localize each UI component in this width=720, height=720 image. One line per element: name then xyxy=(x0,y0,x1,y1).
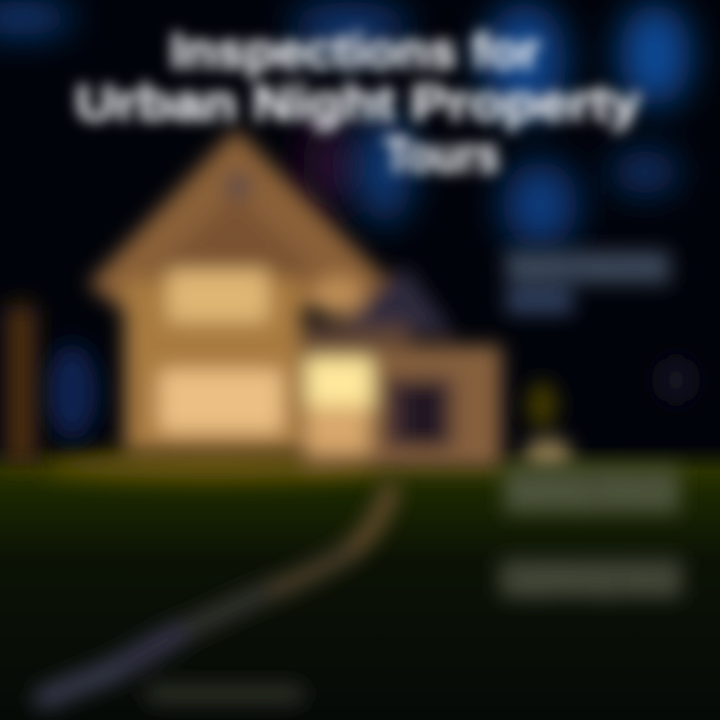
faint distant light xyxy=(659,358,693,402)
text block: sky caption: details xyxy=(505,286,575,316)
attic window xyxy=(225,174,251,198)
porch opening xyxy=(385,378,453,448)
glowing house xyxy=(88,128,502,468)
porch roof band xyxy=(305,325,410,343)
title: Urban Night Property xyxy=(76,75,641,131)
text block: sky caption: Night viewing xyxy=(505,250,670,283)
upper window xyxy=(168,270,268,322)
winding path xyxy=(45,490,390,698)
porch frame xyxy=(303,345,502,468)
title: Inspections for xyxy=(170,23,540,79)
lawn xyxy=(0,440,720,720)
house body xyxy=(124,280,302,452)
text block: sky caption xyxy=(505,250,670,316)
porch dark roof xyxy=(330,265,455,335)
roof and gable xyxy=(88,128,388,308)
lower window xyxy=(160,370,282,432)
olive house glow on lawn xyxy=(40,451,380,479)
tree trunk xyxy=(8,305,34,465)
porch light xyxy=(306,358,372,410)
garden lamp xyxy=(524,381,572,473)
text block: lawn caption one: Safety check xyxy=(505,469,678,510)
blue gap behind tree xyxy=(46,344,98,440)
title xyxy=(76,23,641,183)
text block: lawn caption two: Lighting tour xyxy=(500,562,680,600)
title: Tours xyxy=(384,127,500,183)
dormer light xyxy=(312,276,364,316)
